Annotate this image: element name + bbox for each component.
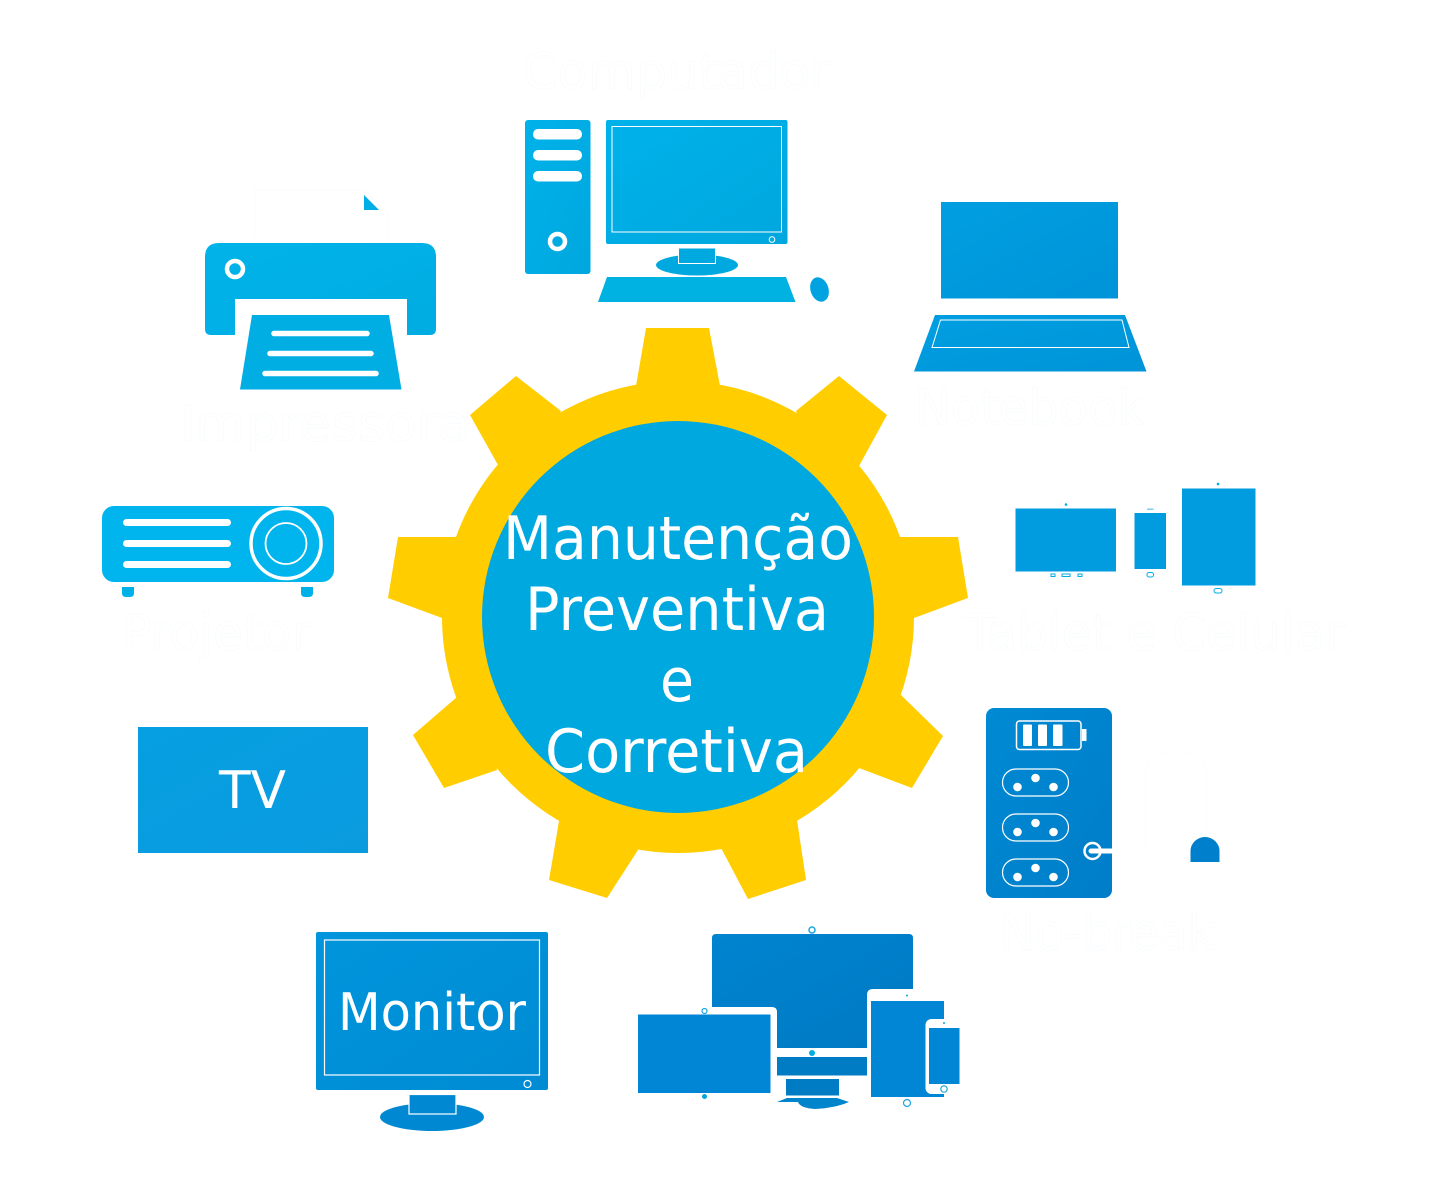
printer group	[180, 190, 470, 453]
TV group	[138, 727, 368, 853]
icon: no-break unit	[986, 708, 1112, 898]
label: Projetor: Projetor	[122, 604, 312, 662]
central heading	[503, 504, 853, 787]
icon: paper outline	[255, 190, 388, 235]
gear centre disc	[482, 421, 874, 813]
computer group	[523, 43, 832, 304]
label: No-break: No-break	[1000, 904, 1215, 962]
label: Computador: Computador	[523, 43, 830, 101]
icon: tower	[525, 120, 590, 274]
icon: portrait tablet	[871, 994, 944, 1106]
icon: phone	[926, 1019, 962, 1094]
icon: landscape tablet	[1016, 503, 1116, 576]
icon: power port	[1084, 843, 1112, 859]
gear with central label	[388, 328, 968, 899]
monitor group	[316, 932, 548, 1131]
gear body	[388, 328, 968, 899]
icon: TV screen	[138, 727, 368, 853]
label: Tablet e Celular: Tablet e Celular	[964, 604, 1345, 662]
icon: mouse	[807, 275, 832, 304]
icon: printed sheet	[240, 315, 402, 390]
icon: keyboard	[598, 277, 796, 302]
no-break group	[986, 708, 1220, 962]
icon: notebook base	[914, 315, 1146, 372]
icon: large display	[712, 927, 913, 1109]
icon: printer body	[205, 243, 436, 335]
label: Impressora: Impressora	[180, 395, 470, 453]
icon: projector feet	[122, 587, 313, 597]
icon: notebook screen	[941, 202, 1118, 298]
icon: socket 3	[1002, 859, 1068, 886]
icon: paper corner	[364, 195, 379, 210]
icon: socket 2	[1002, 814, 1068, 841]
icon: power cable	[1112, 752, 1206, 851]
tablet and phone group	[964, 483, 1345, 662]
label: Notebook: Notebook	[915, 379, 1145, 437]
icon: plug	[1190, 837, 1220, 862]
icon: printer button	[227, 261, 243, 277]
central heading: Corretiva	[545, 717, 808, 787]
label: Monitor: Monitor	[338, 983, 527, 1043]
icon: projector body	[102, 506, 334, 582]
icon: desktop monitor	[606, 120, 788, 276]
multi-device group	[638, 927, 962, 1109]
projector group	[102, 506, 334, 662]
central heading: Manutenção	[503, 504, 853, 574]
icon: monitor	[316, 932, 548, 1131]
central heading: Preventiva	[525, 575, 829, 645]
label: TV: TV	[218, 761, 286, 821]
icon: landscape tablet	[638, 1008, 770, 1099]
icon: socket 1	[1002, 769, 1068, 796]
icon: portrait tablet	[1182, 483, 1256, 593]
central heading: e	[660, 646, 694, 716]
notebook group	[914, 202, 1146, 437]
icon: battery	[1016, 721, 1086, 750]
icon: phone	[1134, 508, 1166, 577]
